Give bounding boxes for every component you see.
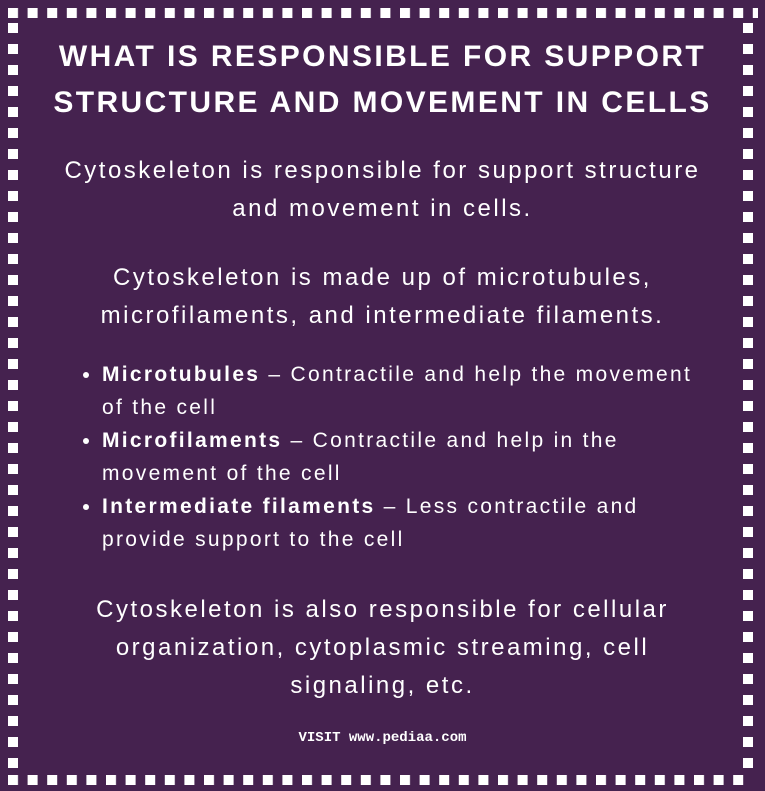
- paragraph 3: signaling, etc.: [290, 672, 475, 699]
- title: WHAT IS RESPONSIBLE FOR SUPPORT: [59, 40, 706, 73]
- paragraph 2: [101, 264, 664, 329]
- title: [53, 40, 712, 119]
- paragraph 1: and movement in cells.: [232, 195, 533, 222]
- bullet list: [83, 363, 692, 551]
- paragraph 1: Cytoskeleton is responsible for support structure: [64, 157, 701, 184]
- paragraph 1: [64, 157, 701, 222]
- bullet list: Intermediate filaments – Less contractile and: [102, 495, 639, 518]
- paragraph 3: [96, 596, 669, 699]
- footer: VISIT www.pediaa.com: [298, 730, 467, 746]
- paragraph 3: organization, cytoplasmic streaming, cell: [116, 634, 649, 661]
- bullet list: movement of the cell: [102, 462, 342, 485]
- paragraph 3: Cytoskeleton is also responsible for cellular: [96, 596, 669, 623]
- bullet list: Microtubules – Contractile and help the movement: [102, 363, 692, 386]
- bullet list: provide support to the cell: [102, 528, 405, 551]
- title: STRUCTURE AND MOVEMENT IN CELLS: [53, 86, 712, 119]
- bullet list: Microfilaments – Contractile and help in the: [102, 429, 619, 452]
- bullet list: of the cell: [102, 396, 217, 419]
- paragraph 2: Cytoskeleton is made up of microtubules,: [113, 264, 652, 291]
- paragraph 2: microfilaments, and intermediate filaments.: [101, 302, 664, 329]
